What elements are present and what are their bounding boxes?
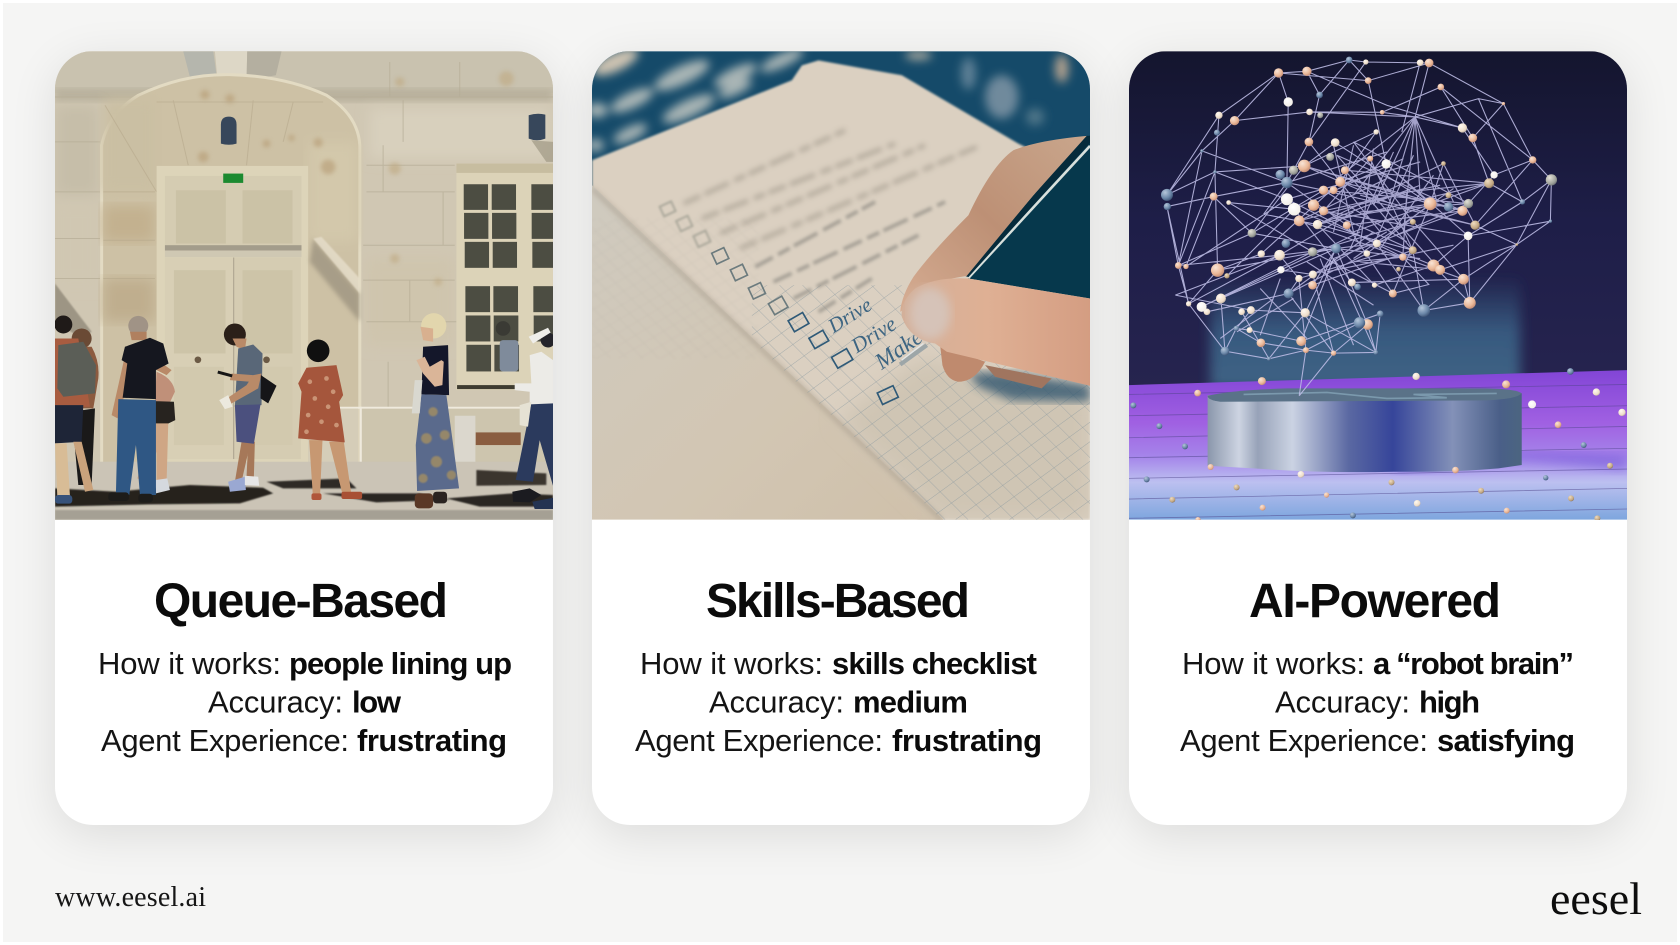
- teal glow behind pedestal: [1210, 275, 1520, 388]
- text block: queue-based details: people lining up: [289, 646, 512, 681]
- text block: queue-based details: How it works:: [98, 646, 281, 681]
- blurred blue fabric background: [586, 43, 1090, 218]
- text block: skills-based details: Agent Experience:: [635, 723, 883, 758]
- text block: skills-based details: medium: [853, 684, 968, 720]
- panel: ai-powered card: [1129, 51, 1627, 825]
- text block: ai-powered details: Agent Experience:: [1180, 723, 1428, 758]
- person: man in dark tee and jeans: [108, 316, 172, 502]
- text block: queue-based details: frustrating: [357, 723, 507, 758]
- plinth and bench: [308, 407, 553, 485]
- text block: queue-based details: Accuracy:: [208, 684, 343, 720]
- text block: skills-based details: frustrating: [892, 723, 1042, 758]
- footer: website url: www.eesel.ai: [55, 882, 206, 913]
- floor shadow: [1393, 453, 1627, 473]
- checklist boxes: [660, 201, 898, 404]
- neural network connections: [1167, 60, 1551, 396]
- handwriting near the pen: Drive: [824, 294, 876, 338]
- panel: queue-based card: [55, 51, 553, 825]
- open notebook page: [592, 60, 1090, 520]
- metallic pedestal: [1208, 388, 1522, 472]
- handwriting near the pen: Make: [870, 324, 928, 376]
- brain nodes: [1161, 57, 1557, 361]
- window: [456, 164, 553, 390]
- handwriting near the pen: [824, 294, 928, 376]
- shadow beneath hand: [968, 372, 1090, 402]
- purple floor with lines: [1129, 370, 1627, 520]
- text block: ai-powered details: high: [1419, 684, 1480, 720]
- handwriting near the pen: Drive: [846, 312, 901, 358]
- text block: skills-based details: How it works:: [640, 646, 823, 681]
- heading: AI-Powered: AI-Powered: [1249, 575, 1501, 628]
- text block: skills-based details: [635, 646, 1042, 758]
- index finger: [900, 136, 1087, 312]
- text block: ai-powered details: How it works:: [1182, 646, 1365, 681]
- cobbled pavement: [55, 462, 553, 520]
- text block: queue-based details: Agent Experience:: [101, 723, 349, 758]
- text block: queue-based details: [98, 646, 512, 758]
- panel: skills-based card: [592, 51, 1090, 825]
- heading: Queue-Based: Queue-Based: [154, 575, 448, 628]
- person: blonde woman in long skirt: [412, 313, 459, 508]
- dark backdrop: [1129, 51, 1627, 391]
- text block: ai-powered details: [1180, 646, 1575, 758]
- stone wall: [55, 51, 553, 520]
- arched door recess: [102, 75, 360, 467]
- blurred handwritten lines: [684, 130, 977, 312]
- double door: [157, 166, 308, 462]
- logo: eesel wordmark: eesel: [1550, 873, 1642, 924]
- floor spheres: [1130, 368, 1626, 522]
- person: woman reading paper at right: [512, 328, 555, 509]
- photo: hand ticking a handwritten checklist: [592, 51, 1090, 520]
- person: woman behind man: [137, 372, 175, 493]
- exit sign: [223, 174, 243, 183]
- text block: ai-powered details: Accuracy:: [1275, 684, 1410, 720]
- wall lamps: [221, 114, 545, 145]
- cast shadows on wall: [55, 140, 553, 338]
- text block: ai-powered details: satisfying: [1437, 723, 1575, 758]
- heading: Skills-Based: Skills-Based: [706, 575, 970, 628]
- person: man reading phone: [217, 323, 277, 492]
- illustration: neural network brain above pedestal: [1129, 51, 1627, 520]
- text block: skills-based details: skills checklist: [832, 646, 1037, 681]
- person: with backpack: [54, 315, 99, 504]
- text block: ai-powered details: a “robot brain”: [1373, 646, 1574, 681]
- person: woman in red floral dress: [298, 339, 362, 500]
- graph paper grid: [752, 285, 1090, 520]
- photo: people queuing at a stone building door: [55, 51, 553, 520]
- pen: [900, 135, 1090, 364]
- thumb: [902, 278, 1090, 388]
- text block: queue-based details: low: [352, 684, 402, 720]
- text block: skills-based details: Accuracy:: [709, 684, 844, 720]
